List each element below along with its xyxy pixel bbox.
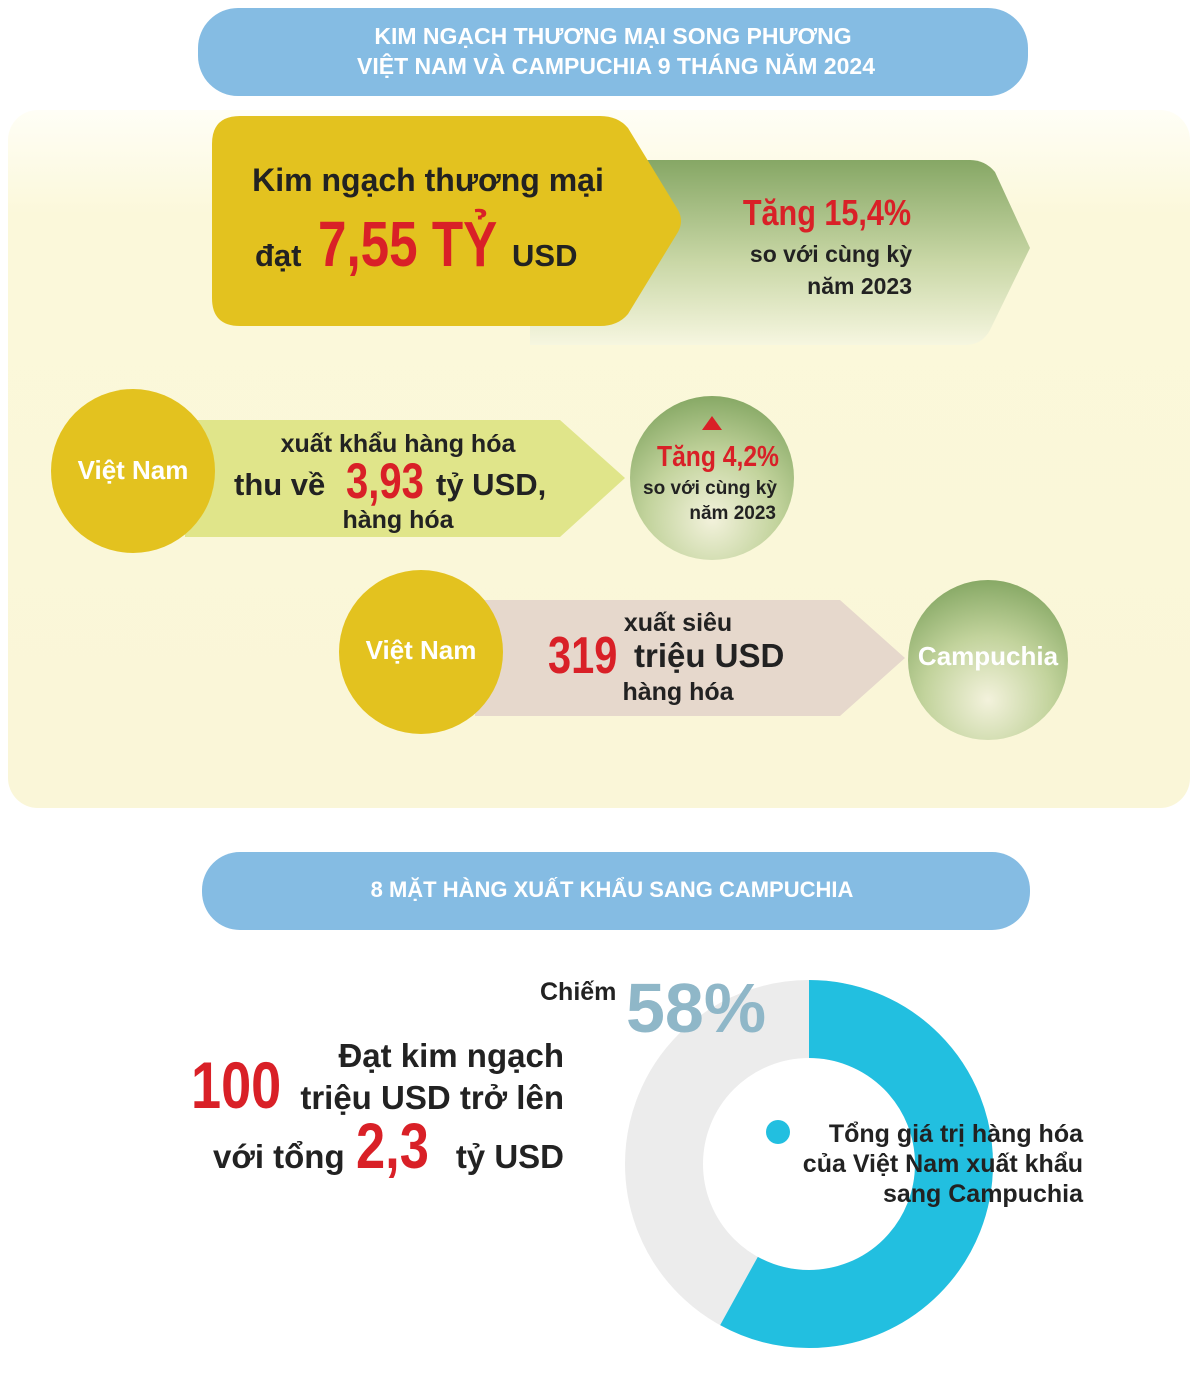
text block: 100 million: với tổng [213,1138,345,1175]
yellow arrow: total trade [212,116,681,326]
row: trade surplus: xuất siêu [624,609,732,637]
row: Vietnam export: Việt Nam [78,455,188,485]
section pill: 8 MẶT HÀNG XUẤT KHẨU SANG CAMPUCHIA [371,877,853,902]
row: trade surplus [339,570,905,734]
yellow arrow: total trade: USD [512,238,577,273]
circle: export growth [630,396,794,560]
green arrow: growth: năm 2023 [807,273,912,299]
row: trade surplus: 319 [548,626,617,684]
section pill [202,852,1030,930]
green arrow: growth [530,160,1030,345]
circle: Campuchia [908,580,1068,740]
callout: 58%: 58% [626,969,766,1047]
title pill [198,8,1028,96]
row: Vietnam export: thu về [234,467,325,502]
row: trade surplus: triệu USD [634,637,784,674]
row: Vietnam export [51,389,625,553]
panel: cream background [8,110,1190,808]
row: trade surplus: Việt Nam [366,635,476,665]
circle: export growth: Tăng 4,2% [657,440,779,472]
donut chart [664,1019,954,1309]
circle: export growth: năm 2023 [689,503,776,524]
callout: 58%: Chiếm [540,978,616,1006]
yellow arrow: total trade: đạt [255,238,302,273]
text block: 100 million: tỷ USD [456,1138,564,1175]
yellow arrow: total trade: Kim ngạch thương mại [252,162,604,198]
text block: 100 million: 100 [191,1048,281,1122]
green arrow: growth: Tăng 15,4% [743,194,911,234]
yellow arrow: total trade: 7,55 TỶ [318,209,497,280]
circle: export growth: so với cùng kỳ [643,478,777,499]
text block: 100 million [191,1037,564,1182]
legend: của Việt Nam xuất khẩu [803,1150,1083,1178]
row: Vietnam export: hàng hóa [342,506,455,534]
title pill: KIM NGẠCH THƯƠNG MẠI SONG PHƯƠNG [374,23,852,49]
legend: Tổng giá trị hàng hóa [829,1120,1084,1148]
row: Vietnam export: tỷ USD, [436,467,546,502]
legend [766,1120,1084,1208]
text block: 100 million: triệu USD trở lên [300,1079,564,1116]
title pill: VIỆT NAM VÀ CAMPUCHIA 9 THÁNG NĂM 2024 [357,52,875,79]
callout: 58% [540,969,766,1047]
row: Vietnam export: 3,93 [346,453,424,509]
circle: Campuchia: Campuchia [918,641,1059,671]
text block: 100 million: 2,3 [356,1111,429,1182]
legend: sang Campuchia [883,1180,1084,1208]
text block: 100 million: Đạt kim ngạch [338,1037,564,1074]
row: trade surplus: hàng hóa [622,678,735,706]
row: Vietnam export: xuất khẩu hàng hóa [281,430,516,458]
green arrow: growth: so với cùng kỳ [750,241,912,267]
